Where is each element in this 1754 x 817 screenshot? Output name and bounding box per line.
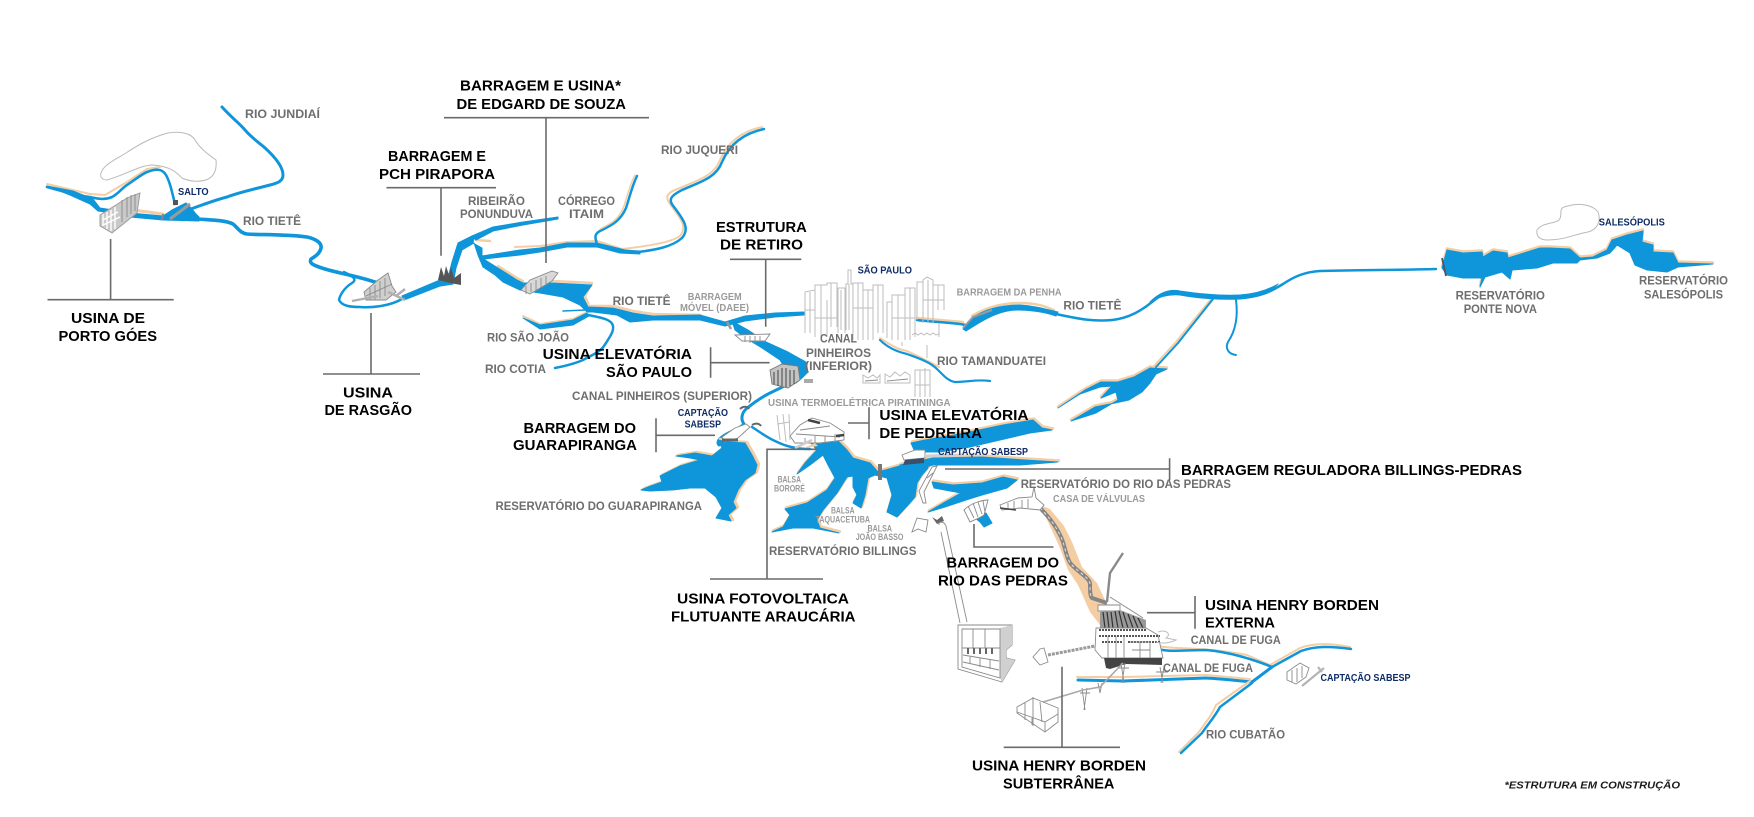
label: Canal Pinheiros Inferior: (INFERIOR) — [805, 361, 872, 373]
callout: Barragem e PCH Pirapora: PCH PIRAPORA — [379, 166, 495, 183]
canal: Pinheiros — [718, 321, 810, 449]
icon: Pirapora PCH — [438, 266, 461, 285]
label: Balsa Bororé: BALSA — [778, 475, 801, 485]
callout: Barragem e Usina Edgard de Souza — [444, 78, 649, 263]
label: Reservatório Ponte Nova: RESERVATÓRIO — [1456, 290, 1545, 303]
callout: Barragem e Usina Edgard de Souza: DE EDGARD DE SOUZA — [456, 96, 626, 113]
label: Córrego Itaim — [558, 195, 615, 221]
label: Canal de Fuga upper: CANAL DE FUGA — [1191, 635, 1281, 647]
river: São João and Cotia — [523, 310, 613, 368]
callout: Barragem Reguladora Billings-Pedras — [945, 458, 1522, 480]
icon: Henry Borden Subterrânea entrance — [1033, 646, 1095, 665]
icon: long underground penstock — [939, 522, 967, 623]
label: Rio São João: RIO SÃO JOÃO — [487, 332, 569, 345]
callout: Usina de Rasgão: USINA — [343, 384, 393, 401]
callout: Usina Henry Borden Externa: USINA HENRY BORDEN — [1205, 597, 1379, 614]
label: Ribeirão Ponunduva: RIBEIRÃO — [468, 195, 525, 208]
reservoir: Rio das Pedras — [928, 476, 1018, 527]
label: Captação Sabesp Guarapiranga — [678, 406, 728, 430]
callout: Usina Fotovoltaica Flutuante Araucária — [671, 449, 856, 626]
label: Balsa João Basso: JOÃO BASSO — [856, 532, 904, 542]
callout: Barragem e PCH Pirapora — [379, 148, 496, 256]
icon: substation — [1017, 697, 1058, 732]
icon: Casa de Válvulas — [1000, 487, 1044, 510]
icon: transmission towers — [1043, 663, 1168, 710]
callout: Usina de Porto Góes: USINA DE — [71, 310, 145, 327]
callout: Barragem e Usina Edgard de Souza: BARRAGEM E USINA* — [460, 78, 621, 95]
penstock: Henry Borden slope — [1040, 505, 1107, 625]
label: Rio Tamanduatei: RIO TAMANDUATEI — [937, 356, 1046, 368]
icon: Captação structures — [740, 407, 761, 426]
label: Barragem da Penha: BARRAGEM DA PENHA — [957, 287, 1062, 299]
icon: Barragem do Rio das Pedras — [964, 500, 988, 522]
callout: Estrutura de Retiro: DE RETIRO — [720, 237, 803, 254]
label: Captação Sabesp Guarapiranga: SABESP — [685, 419, 721, 430]
reservoir: Billings — [772, 418, 1059, 533]
callout: Usina de Rasgão: DE RASGÃO — [324, 401, 412, 419]
label: Salto: SALTO — [178, 187, 209, 198]
reservoir: Ponte Nova and Salesópolis — [1442, 230, 1713, 287]
label: Balsa Bororé — [774, 475, 805, 494]
label: Reservatório do Guarapiranga: RESERVATÓRIO DO GUARAPIRANGA — [496, 500, 702, 513]
label: Balsa João Basso: BALSA — [868, 524, 892, 534]
icon: Porto Góes plant — [100, 193, 140, 233]
outline: Salto city — [101, 132, 216, 181]
callout: Barragem e PCH Pirapora: BARRAGEM E — [388, 148, 486, 165]
icon: Edgard de Souza dam — [521, 271, 558, 294]
icon: São Paulo skyline — [805, 270, 944, 358]
river: Jundiaí — [188, 107, 283, 210]
callout: Usina Fotovoltaica Flutuante Araucária: USINA FOTOVOLTAICA — [677, 591, 849, 608]
label: Reservatório do Rio das Pedras: RESERVATÓRIO DO RIO DAS PEDRAS — [1021, 478, 1231, 491]
icon: Barragem Reguladora Billings-Pedras — [919, 466, 937, 503]
callout: Usina Henry Borden Subterrânea: USINA HENRY BORDEN — [972, 758, 1146, 775]
river: Juqueri — [482, 127, 764, 259]
callout: Usina Elevatória São Paulo — [543, 345, 770, 381]
outline: Salesópolis city — [1537, 204, 1599, 240]
label: Rio Tietê west: RIO TIETÊ — [243, 215, 301, 228]
callout: Usina Elevatória São Paulo: SÃO PAULO — [606, 363, 692, 381]
label: Ribeirão Ponunduva: PONUNDUVA — [460, 209, 533, 221]
label: Balsa Taquacetuba — [816, 506, 870, 525]
label: Córrego Itaim: ITAIM — [569, 209, 604, 221]
icon: Barragem móvel — [727, 322, 731, 329]
label: Canal Pinheiros Inferior — [805, 334, 872, 373]
label: Canal Pinheiros Inferior: CANAL — [820, 334, 857, 346]
callout: Usina de Porto Góes — [48, 239, 174, 345]
label: Balsa Taquacetuba: TAQUACETUBA — [816, 515, 870, 525]
river: Tietê east — [917, 269, 1436, 331]
icon: Captação Sabesp Cubatão — [1287, 663, 1324, 686]
callout: Barragem do Guarapiranga — [513, 418, 715, 454]
callout: Usina Elevatória de Pedreira: USINA ELEVATÓRIA — [879, 406, 1029, 424]
icon: Usina Elevatória de Pedreira and Piratininga — [777, 414, 844, 448]
callout: Usina Elevatória São Paulo: USINA ELEVATÓRIA — [543, 345, 692, 363]
callout: Usina Elevatória de Pedreira: DE PEDREIRA — [879, 425, 982, 442]
callout: Usina Fotovoltaica Flutuante Araucária: FLUTUANTE ARAUCÁRIA — [671, 609, 856, 626]
label: Balsa Bororé: BORORÉ — [774, 484, 805, 494]
label: Córrego Itaim: CÓRREGO — [558, 195, 615, 208]
icon: Henry Borden Subterrânea cavern — [958, 625, 1015, 682]
label: Reservatório Salesópolis: RESERVATÓRIO — [1639, 275, 1728, 288]
label: Usina Termoelétrica Piratininga: USINA TERMOELÉTRICA PIRATININGA — [768, 396, 951, 409]
reservoir: upper Billings arms and Taiaçupeba link — [1058, 299, 1237, 421]
label: Balsa Taquacetuba: BALSA — [831, 506, 855, 516]
label: Casa de Válvulas: CASA DE VÁLVULAS — [1053, 492, 1145, 505]
label: Captação Sabesp Guarapiranga: CAPTAÇÃO — [678, 406, 728, 419]
callout: Usina Elevatória de Pedreira — [848, 406, 1029, 442]
rivers: Canal de Fuga and Cubatão — [1077, 644, 1351, 753]
label: Salesópolis: SALESÓPOLIS — [1599, 216, 1665, 229]
icon: Captação Sabesp Billings — [902, 450, 962, 465]
icon: Small plant near Henry Borden pipe — [912, 516, 944, 532]
callout: Usina Henry Borden Subterrânea: SUBTERRÂNEA — [1003, 774, 1115, 792]
label: Barragem Móvel: MÓVEL (DAEE) — [680, 301, 749, 314]
icon: Penha barrage — [963, 310, 992, 328]
label: Balsa João Basso — [856, 524, 904, 542]
callout: Usina de Rasgão — [323, 313, 420, 419]
label: Reservatório Ponte Nova: PONTE NOVA — [1464, 304, 1537, 316]
label: Reservatório Billings: RESERVATÓRIO BILLINGS — [769, 545, 917, 558]
icon: Salto barrage — [162, 200, 190, 220]
label: Rio Cubatão: RIO CUBATÃO — [1206, 729, 1285, 742]
callout: Usina de Porto Góes: PORTO GÓES — [58, 327, 157, 345]
callout: Estrutura de Retiro — [716, 219, 807, 327]
label: Reservatório Ponte Nova — [1456, 290, 1545, 316]
label: Reservatório Salesópolis — [1639, 275, 1728, 302]
callout: Barragem do Guarapiranga: BARRAGEM DO — [524, 420, 636, 437]
callout: Usina Henry Borden Externa: EXTERNA — [1205, 615, 1275, 632]
icon: Guarapiranga dam — [722, 424, 750, 442]
label: São Paulo: SÃO PAULO — [858, 264, 912, 277]
icon: Billings central dam — [878, 464, 882, 480]
label: Captação Sabesp Billings: CAPTAÇÃO SABESP — [938, 445, 1028, 458]
callout: Barragem do Guarapiranga: GUARAPIRANGA — [513, 437, 637, 454]
label: Canal Pinheiros Superior: CANAL PINHEIROS (SUPERIOR) — [572, 391, 752, 403]
label: Rio Jundiaí: RIO JUNDIAÍ — [245, 108, 321, 121]
callout: Barragem Reguladora Billings-Pedras: BARRAGEM REGULADORA BILLINGS-PEDRAS — [1181, 462, 1522, 479]
icon: Ponte Nova dam — [1442, 258, 1446, 276]
callout: Barragem do Rio das Pedras — [938, 524, 1068, 589]
label: Barragem Móvel: BARRAGEM — [688, 291, 742, 303]
label: Canal de Fuga lower: CANAL DE FUGA — [1163, 663, 1253, 675]
label: Rio Cotia: RIO COTIA — [485, 364, 546, 376]
icon: Henry Borden Externa plant — [1095, 553, 1176, 669]
river: Itaim branch — [472, 217, 558, 240]
callout: Barragem do Rio das Pedras: RIO DAS PEDRAS — [938, 572, 1068, 589]
footnote: *ESTRUTURA EM CONSTRUÇÃO — [1504, 779, 1680, 792]
callout: Estrutura de Retiro: ESTRUTURA — [716, 219, 807, 236]
river: Tietê west (Porto Góes to Rasgão) — [47, 167, 453, 307]
river: Tietê middle with Edgard de Souza reservoir — [440, 236, 804, 326]
icon: Retiro structure — [735, 334, 770, 343]
label: Rio Juqueri: RIO JUQUERI — [661, 145, 738, 157]
icon: Usina Elevatória São Paulo — [770, 364, 813, 388]
label: Rio Tietê east: RIO TIETÊ — [1063, 300, 1122, 313]
label: Ribeirão Ponunduva — [460, 195, 533, 221]
icon: Rasgão plant — [352, 273, 405, 301]
river: Tamanduateí — [880, 338, 990, 382]
callout: Usina Henry Borden Subterrânea — [972, 667, 1146, 792]
label: Barragem Móvel — [680, 291, 749, 314]
label: Rio Tietê center: RIO TIETÊ — [613, 295, 671, 308]
reservoir: Guarapiranga — [641, 439, 759, 521]
label: Captação Sabesp Cubatão: CAPTAÇÃO SABESP — [1320, 671, 1411, 684]
label: Canal Pinheiros Inferior: PINHEIROS — [806, 348, 871, 360]
callout: Usina Henry Borden Externa — [1147, 596, 1379, 632]
callout: Barragem do Rio das Pedras: BARRAGEM DO — [946, 555, 1059, 572]
label: Reservatório Salesópolis: SALESÓPOLIS — [1644, 289, 1723, 302]
icon: factory skyline — [863, 368, 930, 397]
